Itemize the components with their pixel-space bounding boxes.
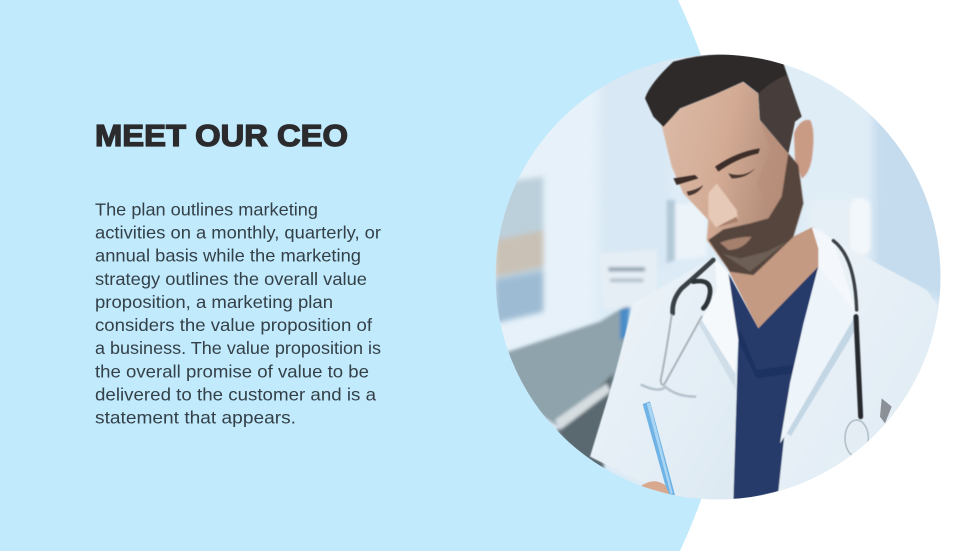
body text block: considers the value proposition of xyxy=(95,315,372,335)
lips xyxy=(720,237,752,250)
head: coordinates offset to the face crop xyxy=(645,54,813,275)
body text block: proposition, a marketing plan xyxy=(95,292,333,312)
pen and hand xyxy=(643,401,675,496)
scrubs xyxy=(728,267,818,502)
body text block: The plan outlines marketing xyxy=(95,200,318,220)
body text block xyxy=(95,200,381,428)
body text block: a business. The value proposition is xyxy=(95,338,381,358)
body text block: strategy outlines the overall value xyxy=(95,269,367,289)
right-cheek shading xyxy=(762,124,766,128)
background panel: light blue curved shape xyxy=(0,0,740,551)
photo: doctor in circular frame xyxy=(490,40,957,510)
neck xyxy=(723,227,820,328)
body text block: the overall promise of value to be xyxy=(95,361,369,381)
stethoscope xyxy=(642,241,861,417)
nose xyxy=(708,183,738,228)
title: MEET OUR CEO xyxy=(95,119,348,153)
body text block: annual basis while the marketing xyxy=(95,246,361,266)
body text block: delivered to the customer and is a xyxy=(95,384,376,404)
coat right xyxy=(777,227,938,493)
brows and eyes xyxy=(715,148,760,172)
ear xyxy=(794,120,813,178)
face xyxy=(662,82,803,275)
beard xyxy=(708,153,803,275)
lapels xyxy=(779,266,819,444)
body text block: activities on a monthly, quarterly, or xyxy=(95,223,381,243)
hair xyxy=(645,54,802,153)
coat left xyxy=(590,227,938,502)
body text block: statement that appears. xyxy=(95,408,296,428)
